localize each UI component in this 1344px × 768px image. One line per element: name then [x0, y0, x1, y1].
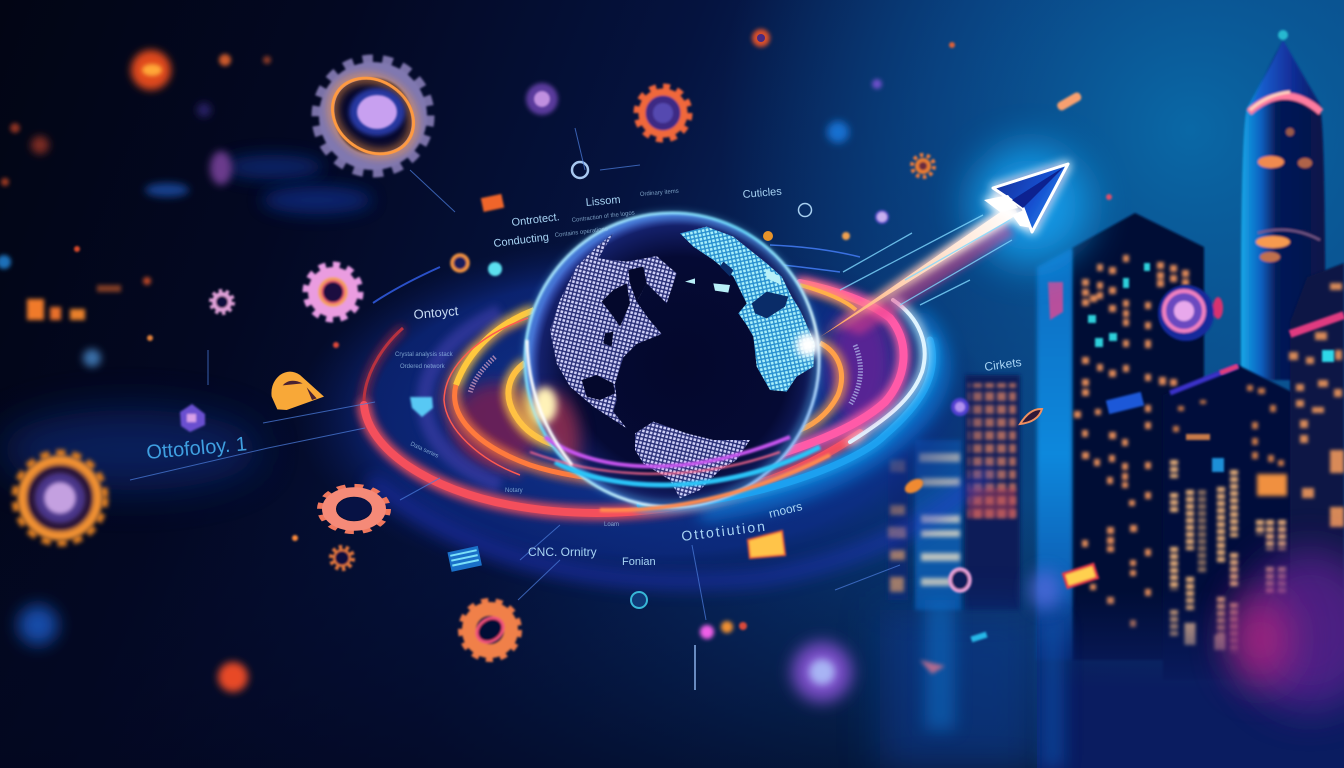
target badge on building: [1158, 285, 1223, 341]
window: blue bar: [1106, 392, 1144, 414]
gear: bottom orange: [462, 602, 518, 658]
gear: coral flat: [321, 487, 387, 531]
label: Cuticles: Cuticles: [742, 186, 783, 201]
fine print: Crystal analysis stack: [395, 352, 454, 358]
label: Ottofoloy: Ottofoloy. 1: [146, 433, 248, 464]
building: front block: [1163, 365, 1292, 680]
icon: orange badge: [763, 231, 773, 241]
windows: central block: [1074, 255, 1189, 627]
icon: ring right: [876, 211, 888, 223]
labels: [146, 186, 1022, 568]
label: rnoors: rnoors: [767, 499, 804, 521]
gear: pink: [306, 265, 360, 319]
gear: small orange outline: [331, 547, 353, 569]
warm glow through the glass: [530, 380, 590, 470]
ring: orange left: [444, 310, 610, 480]
rings in front of the globe: [530, 437, 830, 510]
icon: orange ring: [452, 255, 468, 271]
cityscape: [880, 30, 1344, 768]
reflection glow: [880, 550, 1344, 768]
arrow head: [984, 164, 1068, 232]
ring: white cyan: [850, 300, 925, 442]
fine print: Contains operations: [555, 227, 608, 239]
label: CNC Ornitry: CNC. Ornitry: [528, 545, 597, 559]
icon: pink blob: [920, 660, 945, 674]
icon: orange streak: [1056, 91, 1083, 112]
windows: front block columns: [1174, 460, 1282, 653]
icon: blue list: [447, 546, 482, 572]
windows: cyan: [1088, 263, 1150, 347]
building: tall tower: [1241, 30, 1325, 380]
icon: teal ring: [631, 592, 647, 608]
building: central tall block: [1037, 213, 1204, 660]
islands: [685, 268, 782, 293]
icon: ring above globe: [798, 204, 812, 216]
icon: padlock: [271, 372, 324, 410]
icon: pink ring: [950, 569, 970, 591]
ring: wide blue glow right: [700, 315, 941, 512]
ring interior glow left: [452, 383, 542, 467]
gear: small right: [912, 155, 934, 177]
flare on the globe: [527, 333, 820, 465]
label: Fonian: Fonian: [622, 556, 656, 568]
sea cutouts north america: [582, 267, 647, 400]
fine print: [395, 189, 679, 528]
connector lines: [130, 128, 900, 690]
label: Lissom: Lissom: [585, 194, 621, 209]
label: Cirkets: Cirkets: [983, 355, 1022, 374]
arrow trail: [820, 204, 1018, 337]
continent: europe and africa: [680, 227, 815, 392]
ring text ticks: [470, 345, 860, 405]
growth arrow: [820, 145, 1090, 337]
icon: purple shield: [180, 404, 205, 432]
glowing orbs: [0, 29, 1112, 702]
icon: cyan streak: [970, 632, 988, 642]
fine print: Data series: [409, 441, 439, 460]
icon: small orange tag: [902, 476, 926, 496]
fine print: Notary: [505, 488, 523, 494]
ring: outer red: [364, 328, 860, 513]
fine print: Contraction of the logos: [572, 210, 635, 224]
continent: north america: [550, 233, 677, 428]
gear: large left ring: [15, 453, 105, 543]
continent: south america: [635, 422, 750, 498]
globe rim light: [525, 213, 819, 507]
sea cutouts europe: [720, 262, 788, 318]
ring: orange inner right: [793, 285, 856, 432]
building: far low blocks: [888, 375, 1020, 610]
ring: purple band left: [424, 312, 500, 485]
ring interior glow right: [828, 305, 892, 425]
label: Conducting: Conducting: [493, 231, 550, 250]
icon: yellow card: [748, 531, 785, 558]
continents: [516, 227, 815, 498]
icon: red tag: [1064, 564, 1097, 587]
icon: cyan dot: [488, 262, 502, 276]
label: Ottotiution: Ottotiution: [680, 518, 766, 544]
fine print: Loam: [604, 522, 619, 528]
icon: small eye arrow: [1020, 409, 1042, 424]
small icons: [27, 91, 1097, 674]
label: Ontrotect: Ontrotect.: [511, 211, 560, 229]
ring: pink right: [700, 283, 904, 475]
ring: outer cyan: [640, 340, 933, 505]
icon: cyan shield: [410, 397, 433, 417]
gear: top centre: [637, 87, 689, 139]
orbit rings: [364, 283, 941, 513]
gear: small pink: [211, 291, 233, 313]
globe: [516, 213, 819, 507]
fine print: Ordinary items: [640, 189, 679, 198]
orbit halo disc: [295, 237, 995, 593]
label: Ontoyct: Ontoyct: [413, 303, 459, 322]
glow: left flare: [520, 380, 560, 432]
fine print: Ordered network: [400, 364, 446, 370]
ring: yellow inner left: [508, 363, 555, 445]
gear: large top: [317, 60, 429, 172]
icon: white ring: [572, 162, 588, 178]
icon: orange card: [481, 194, 504, 212]
icon: orange bars: [27, 277, 151, 320]
icon: purple ring lower: [953, 400, 967, 414]
globe sphere: [525, 213, 819, 507]
building: right edge block: [1289, 263, 1344, 768]
